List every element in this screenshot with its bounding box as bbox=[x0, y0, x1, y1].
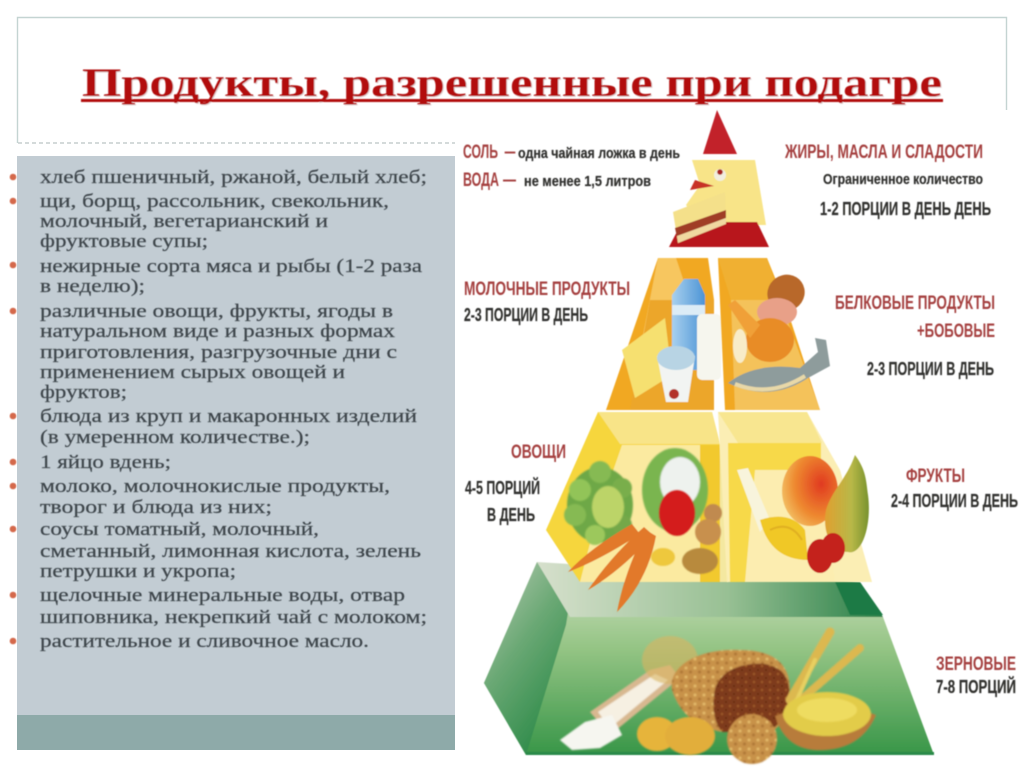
icon: carrots bbox=[568, 524, 656, 612]
label: vegetables: 4-5 ПОРЦИЙ bbox=[465, 477, 540, 498]
icon: chicken leg bbox=[728, 300, 794, 363]
food list text bbox=[40, 168, 427, 652]
food list text: сметанный, лимонная кислота, зелень bbox=[40, 542, 421, 562]
tier box: vegetables bbox=[546, 412, 728, 582]
food list text: щелочные минеральные воды, отвар bbox=[40, 586, 405, 606]
food list text: растительное и сливочное масло. bbox=[40, 632, 369, 652]
food list text: 1 яйцо вдень; bbox=[40, 453, 171, 473]
food list text: различные овощи, фрукты, ягоды в bbox=[40, 302, 393, 322]
label: vegetables: В ДЕНЬ bbox=[487, 505, 535, 525]
food list text: молочный, вегетарианский и bbox=[40, 212, 328, 232]
label: salt and water: одна чайная ложка в день bbox=[518, 145, 680, 162]
food list text: нежирные сорта мяса и рыбы (1-2 раза bbox=[40, 257, 422, 277]
food list text: соусы томатный, молочный, bbox=[40, 520, 319, 540]
pyramid tier: grains bbox=[484, 562, 934, 764]
food list text: щи, борщ, рассольник, свекольник, bbox=[40, 192, 389, 212]
icon: yogurt cup bbox=[657, 346, 695, 402]
food list text: фруктов; bbox=[40, 383, 127, 403]
icon: milk carton bbox=[672, 279, 705, 370]
label: vegetables bbox=[465, 442, 566, 525]
pyramid tier: vegetables bbox=[546, 412, 728, 612]
label: fruits: ФРУКТЫ bbox=[906, 466, 965, 487]
food list text: петрушки и укропа; bbox=[40, 562, 236, 582]
label: fats, oils and sweets: Ограниченное количество bbox=[823, 171, 983, 188]
icon: strawberries bbox=[807, 533, 845, 573]
icon: banana bbox=[737, 468, 808, 560]
label: protein products and legumes bbox=[835, 293, 995, 379]
label: salt and water: ВОДА bbox=[463, 170, 499, 191]
pyramid tier: proteins bbox=[718, 258, 830, 410]
food list text: фруктовые супы; bbox=[40, 232, 208, 252]
pyramid tier: dairy bbox=[606, 258, 721, 410]
label: salt and water bbox=[463, 142, 680, 191]
cheese and butter bbox=[686, 160, 766, 225]
icon: bowl of grains bbox=[775, 692, 876, 750]
icon: wheat bbox=[790, 632, 860, 715]
icon: cream and cherry bbox=[690, 169, 726, 190]
icon: ham bbox=[757, 267, 812, 326]
red apex bbox=[703, 110, 737, 154]
icon: onions and potatoes bbox=[651, 504, 722, 574]
icon: rice scoop bbox=[560, 665, 680, 750]
icon: tomato pepper bbox=[659, 490, 695, 536]
label: vegetables: ОВОЩИ bbox=[511, 442, 566, 463]
food list text: применением сырых овощей и bbox=[40, 363, 345, 383]
panel: allowed foods list bbox=[17, 156, 455, 750]
icon: cake slice bbox=[673, 192, 726, 243]
pyramid tier: fats and sweets bbox=[669, 110, 769, 247]
label: fats, oils and sweets bbox=[784, 142, 991, 219]
food list text: шиповника, некрепкий чай с молоком; bbox=[40, 608, 427, 628]
food list text: приготовления, разгрузочные дни с bbox=[40, 343, 397, 363]
label: fruits bbox=[891, 466, 1018, 511]
food list text: (в умеренном количестве.); bbox=[40, 428, 310, 448]
pyramid tier: fruits bbox=[718, 412, 872, 582]
icon: cabbage bbox=[642, 448, 708, 532]
slide frame bbox=[18, 18, 1006, 143]
title: Продукты, разрешенные при подагре bbox=[82, 60, 942, 105]
panel bottom strip bbox=[17, 715, 455, 750]
food list text: творог и блюда из них; bbox=[40, 498, 272, 518]
icon: bread rolls bbox=[637, 714, 777, 764]
icon: fish bbox=[728, 338, 830, 392]
icon: milk glass bbox=[697, 314, 721, 380]
title: Продукты, разрешенные при подагре bbox=[83, 61, 943, 106]
label: salt and water: СОЛЬ bbox=[463, 142, 498, 163]
icon: apple bbox=[782, 456, 838, 526]
icon: lettuce bbox=[564, 461, 633, 545]
label: grains bbox=[936, 654, 1016, 697]
food list text: блюда из круп и макаронных изделий bbox=[40, 407, 417, 427]
label: dairy products: МОЛОЧНЫЕ ПРОДУКТЫ bbox=[464, 279, 630, 300]
label: dairy products: 2-3 ПОРЦИИ В ДЕНЬ bbox=[464, 305, 588, 325]
icon: cheese wedge bbox=[622, 318, 672, 398]
food list text: молоко, молочнокислые продукты, bbox=[40, 477, 390, 497]
bullet markers bbox=[10, 174, 16, 644]
label: salt and water: — bbox=[503, 170, 516, 191]
tier box: fruits bbox=[718, 412, 872, 582]
tier box: dairy bbox=[606, 258, 714, 410]
food list text: в неделю); bbox=[40, 277, 145, 297]
label: dairy products bbox=[464, 279, 630, 325]
food list text: натуральном виде и разных формах bbox=[40, 322, 396, 342]
label: salt and water: – bbox=[504, 142, 516, 163]
icon: pear bbox=[825, 455, 869, 552]
icon: bread loaf bbox=[642, 636, 790, 732]
food list text: хлеб пшеничный, ржаной, белый хлеб; bbox=[40, 168, 427, 188]
label: salt and water: не менее 1,5 литров bbox=[524, 173, 651, 190]
tier base bbox=[669, 222, 769, 247]
tier box: proteins bbox=[718, 258, 820, 410]
tier base: green box bbox=[484, 562, 934, 755]
